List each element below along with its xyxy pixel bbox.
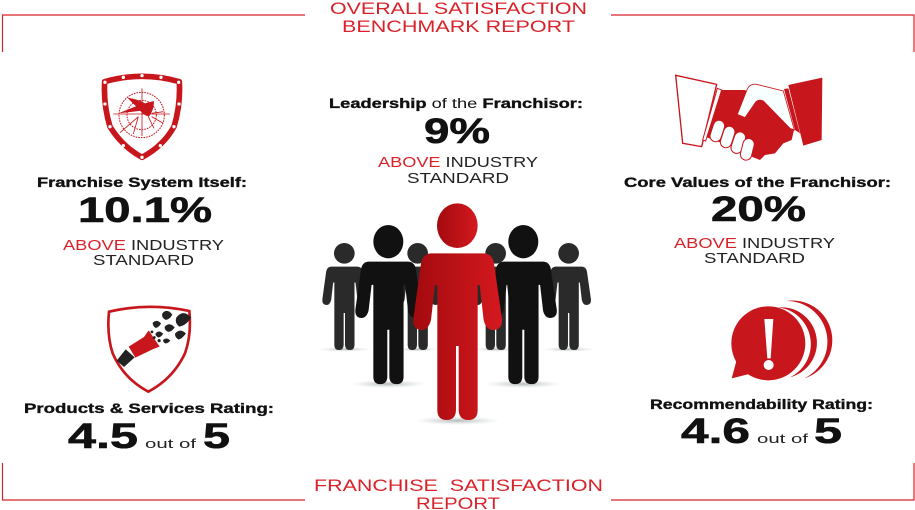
text: products and services rating: 4.5 (68, 417, 138, 456)
frame: top right bracket (611, 15, 914, 52)
icon: spray shield (108, 307, 191, 392)
title (330, 0, 587, 36)
footer title (314, 476, 603, 510)
text: core values of the franchisor: 20% (711, 190, 806, 229)
text: franchise system itself (37, 175, 247, 269)
frame: bottom right bracket (611, 463, 914, 500)
text: leadership of the franchisor: ABOVE INDUSTRY (378, 154, 538, 171)
text: franchise system itself: ABOVE INDUSTRY (63, 237, 224, 254)
title: BENCHMARK REPORT (342, 17, 575, 36)
text: recommendability rating: 5 (814, 412, 842, 451)
icon: handshake (676, 75, 822, 161)
text: core values of the franchisor: ABOVE INDUSTRY (674, 235, 835, 252)
icon: mosquito shield (103, 74, 181, 159)
front red person (413, 203, 502, 420)
text: core values of the franchisor: STANDARD (704, 250, 805, 267)
text: franchise system itself: STANDARD (93, 252, 194, 269)
icon: alert speech bubble (731, 300, 832, 380)
text: leadership of the franchisor (329, 96, 583, 187)
shadows (318, 347, 595, 425)
text: leadership of the franchisor: Leadership of the Franchisor: (329, 96, 583, 111)
text: leadership of the franchisor: 9% (424, 112, 490, 151)
text: franchise system itself: Franchise System Itself: (37, 175, 247, 190)
frame: top left bracket (2, 15, 305, 52)
text: products and services rating: 5 (203, 417, 230, 456)
footer title: FRANCHISE SATISFACTION (314, 476, 603, 495)
frame: bottom left bracket (2, 463, 305, 500)
text: products and services rating: Products & Services Rating: (24, 401, 274, 416)
text: recommendability rating: out of (757, 431, 809, 446)
text: recommendability rating: Recommendability Rating: (650, 397, 873, 412)
text: franchise system itself: 10.1% (78, 191, 212, 230)
text: leadership of the franchisor: STANDARD (407, 170, 509, 187)
text: recommendability rating: 4.6 (681, 412, 750, 451)
text: recommendability rating (650, 397, 873, 451)
text: products and services rating: out of (145, 436, 197, 451)
text: core values of the franchisor (624, 175, 891, 267)
text: products and services rating (24, 401, 274, 456)
middle row people (355, 225, 557, 384)
people group illustration (318, 203, 595, 425)
text: core values of the franchisor: Core Values of the Franchisor: (624, 175, 891, 190)
back row people (322, 243, 591, 350)
